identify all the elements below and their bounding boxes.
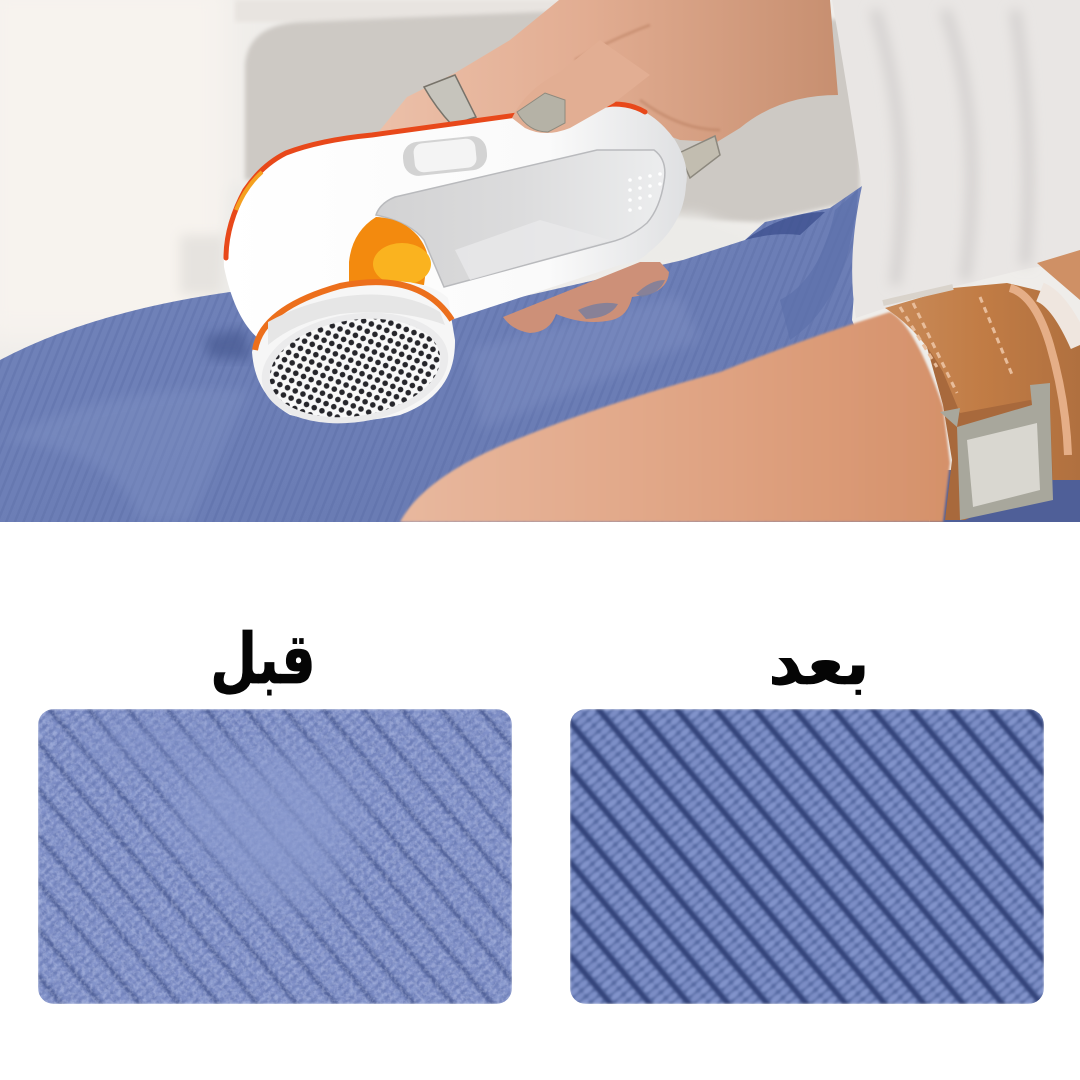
lint remover device — [224, 103, 720, 436]
strap — [885, 283, 1080, 480]
watch face — [940, 383, 1053, 520]
shadow beside cutting head — [205, 328, 252, 360]
cutting head — [252, 281, 456, 436]
lint fuzz — [38, 709, 512, 1004]
heading: after: بعد — [768, 627, 870, 699]
index finger with painted nail — [512, 40, 650, 133]
knit visible under the watch — [930, 470, 1080, 522]
heading: before: قبل — [210, 618, 316, 700]
skin beyond the strap — [1037, 250, 1080, 300]
orange inner cylinder — [349, 217, 428, 285]
hero photo: lint remover in use on a blue sweater — [0, 0, 1080, 530]
vent dots area — [628, 172, 662, 212]
leather watch strap and bracelets — [883, 250, 1080, 520]
buckle bar — [883, 287, 953, 303]
strap stitching — [900, 297, 1013, 393]
upper hand holding the device — [376, 0, 838, 142]
sleeve folds — [745, 212, 825, 240]
white bangle — [1040, 292, 1080, 345]
white shirt — [836, 2, 1042, 299]
power switch — [401, 135, 489, 177]
transparent lint chamber — [376, 150, 665, 287]
panel: after clean fabric — [570, 709, 1044, 1004]
lower hand resting on sweater — [400, 312, 950, 522]
fingers beneath the device — [503, 262, 669, 333]
strap backing behind watch — [926, 346, 1053, 520]
blurred room background — [0, 0, 1080, 522]
orange top trim — [226, 104, 645, 258]
panel: before fabric with lint — [38, 709, 512, 1004]
device body — [224, 103, 687, 340]
blue sweater — [0, 186, 1080, 530]
power cable connector — [679, 136, 720, 178]
ring — [424, 75, 476, 125]
rose-gold bangle — [1010, 288, 1068, 455]
